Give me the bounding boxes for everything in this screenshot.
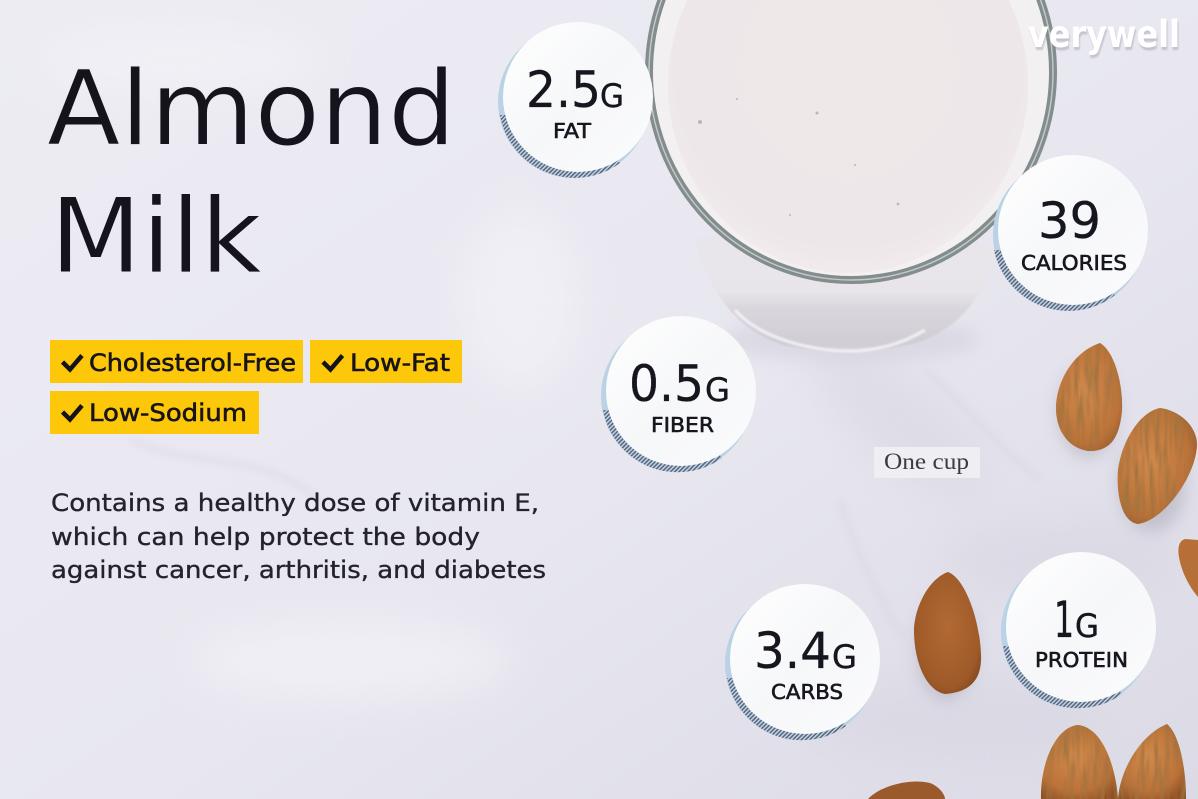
milk surface bbox=[668, 0, 1028, 273]
description text: which can help protect the body bbox=[51, 523, 480, 551]
title: Milk bbox=[50, 177, 262, 297]
badge: low-fat: Low-Fat bbox=[350, 349, 450, 377]
almond 6 bbox=[1116, 722, 1188, 799]
badge: cholesterol-free: Cholesterol-Free bbox=[89, 349, 296, 377]
stat: protein bbox=[1001, 552, 1156, 708]
stat: protein: 1 bbox=[1054, 591, 1074, 649]
almond 3, right edge bbox=[1178, 539, 1198, 597]
stat: calories bbox=[993, 155, 1148, 311]
stat: fat: 2.5 bbox=[526, 61, 601, 119]
stat: carbs: 3.4 bbox=[754, 622, 831, 680]
almond 7, bottom edge bbox=[868, 781, 945, 799]
stat: fiber: FIBER bbox=[651, 413, 714, 437]
glass body bbox=[695, 200, 1000, 352]
badge: cholesterol-free bbox=[50, 340, 303, 383]
stat: fiber: G bbox=[705, 371, 730, 409]
badges bbox=[50, 340, 462, 434]
almonds bbox=[868, 340, 1198, 799]
stat: fat bbox=[498, 22, 653, 178]
badge: low-sodium bbox=[50, 391, 259, 434]
stat: fat: FAT bbox=[553, 119, 592, 143]
almond 1 bbox=[1056, 343, 1122, 451]
stat: carbs: G bbox=[832, 638, 857, 676]
description text bbox=[51, 489, 546, 584]
title bbox=[47, 50, 456, 297]
almond 4 bbox=[914, 572, 981, 694]
badge: low-fat bbox=[310, 340, 462, 383]
description text: against cancer, arthritis, and diabetes bbox=[51, 556, 546, 584]
description text: Contains a healthy dose of vitamin E, bbox=[51, 489, 539, 517]
badge: low-sodium: Low-Sodium bbox=[89, 399, 247, 427]
stat: carbs: CARBS bbox=[771, 680, 843, 704]
almond 2 bbox=[1118, 408, 1197, 524]
one cup label bbox=[874, 447, 980, 478]
glass rim bbox=[649, 0, 1053, 280]
almond 5 bbox=[1040, 725, 1118, 799]
almond shadows bbox=[916, 366, 1186, 700]
glass of almond milk bbox=[649, 0, 1053, 362]
glass shadow bbox=[720, 318, 980, 362]
stat: protein: PROTEIN bbox=[1035, 648, 1128, 672]
stat: carbs bbox=[725, 584, 880, 740]
stat: calories: CALORIES bbox=[1021, 251, 1127, 275]
one cup label: One cup bbox=[884, 449, 969, 474]
stat: fiber bbox=[601, 316, 756, 472]
title: Almond bbox=[47, 50, 456, 170]
stat: protein: G bbox=[1075, 607, 1099, 645]
stat: fiber: 0.5 bbox=[629, 355, 704, 413]
stat: fat: G bbox=[600, 77, 624, 115]
stat: calories: 39 bbox=[1038, 192, 1101, 250]
